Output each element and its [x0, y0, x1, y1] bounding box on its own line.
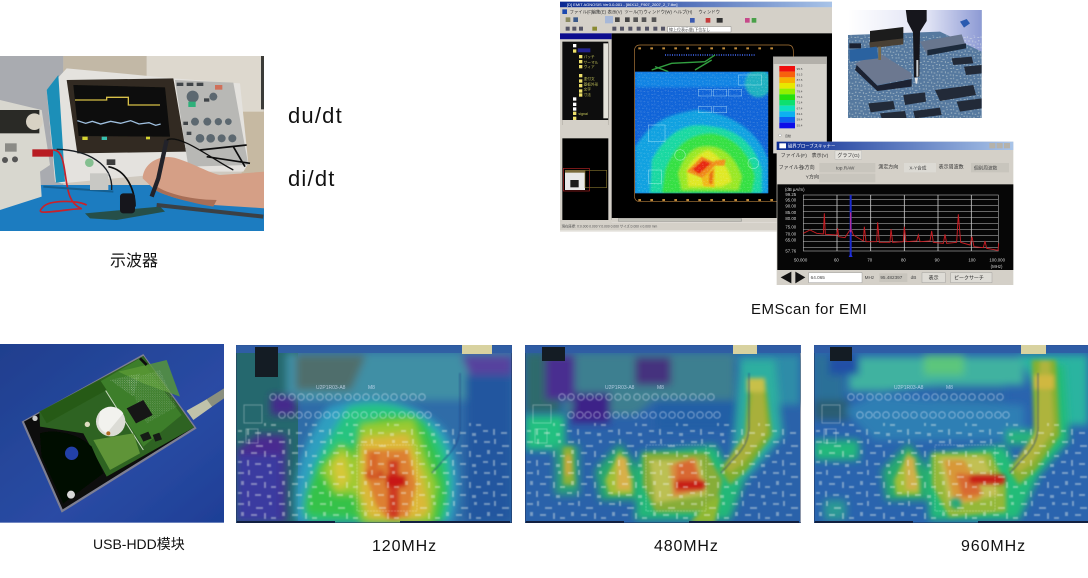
legend window: 71.4 — [797, 101, 803, 105]
legend window: 75.4 — [797, 95, 803, 99]
window: magnetic probe scanner spectrum: グラフ(G) — [837, 152, 860, 159]
label: EMScan for EMI: EMScan for EMI — [751, 301, 867, 318]
legend window: 自動 — [785, 133, 791, 138]
window: magnetic probe scanner spectrum: 個別周波数 — [974, 164, 998, 171]
label: USB-HDD module: USB-HDD模块 — [93, 536, 185, 552]
spectrum chart: 100 — [968, 257, 976, 262]
window: magnetic probe scanner spectrum: 磁界プローブスキャナー — [788, 143, 835, 150]
heat map: 480MHz — [525, 345, 801, 523]
spectrum chart: 90 — [935, 257, 940, 262]
window: magnetic probe scanner spectrum: 測定方向 — [878, 164, 898, 171]
formula: du/dt: du/dt — [288, 103, 343, 128]
label: 960MHz: 960MHz — [961, 538, 1026, 555]
window: EMScan PCB heat map software: パッチ — [584, 54, 595, 59]
window: EMScan PCB heat map software: ファイル(F) — [570, 9, 593, 15]
spectrum chart: 60 — [834, 257, 839, 262]
legend window: 79.4 — [797, 89, 803, 93]
window: EMScan PCB heat map software: 寸法 — [584, 92, 591, 97]
spectrum chart: 95.00 — [785, 198, 797, 203]
window: magnetic probe scanner spectrum: X方向 — [801, 164, 815, 171]
window: EMScan PCB heat map software: 表示(V) — [608, 8, 623, 15]
window: EMScan PCB heat map software: ウィンドウ — [698, 8, 720, 14]
window: EMScan PCB heat map software: 塗付文 — [584, 76, 595, 81]
window: magnetic probe scanner spectrum: 表示周波数 — [939, 164, 964, 171]
spectrum chart: 80 — [901, 257, 906, 262]
legend window: 91.5 — [797, 72, 803, 76]
window: EMScan PCB heat map software: signal — [578, 112, 588, 116]
window: magnetic probe scanner spectrum: 表示 — [929, 274, 939, 281]
window: EMScan PCB heat map software: サーマル — [584, 59, 599, 64]
legend window: 87.5 — [797, 78, 803, 82]
legend window: 63.4 — [797, 112, 803, 116]
window: magnetic probe scanner spectrum: ファイル(F) — [781, 153, 807, 159]
heat map: 960MHz — [814, 345, 1088, 523]
window: magnetic probe scanner spectrum: X-Y合成 — [909, 164, 927, 171]
spectrum chart: 90.00 — [785, 204, 797, 209]
window: magnetic probe scanner spectrum: ピークサーチ — [954, 275, 984, 281]
spectrum chart: 99.25 — [785, 192, 797, 197]
spectrum chart — [777, 184, 1013, 270]
window: EMScan PCB heat map software: 文字 — [584, 87, 591, 92]
window: EMScan PCB heat map software: 線上位表示層(下位なし — [669, 26, 710, 32]
window: magnetic probe scanner spectrum: dB — [911, 275, 916, 280]
window: EMScan PCB heat map software: ツール(T) — [624, 9, 643, 14]
window: EMScan PCB heat map software: ヘルプ(H) — [673, 9, 693, 15]
spectrum chart: 75.00 — [785, 225, 797, 230]
window: EMScan PCB heat map software: 現在座標: X:0.000 0.000 Y:0.000 0.000 サイズ:0.000 x 0.000 mm — [562, 224, 658, 229]
photo: USB-HDD module — [0, 344, 224, 523]
photo: probe over circuit board — [848, 9, 982, 118]
window: magnetic probe scanner spectrum: MHz — [865, 275, 875, 280]
legend window: 59.4 — [797, 118, 803, 122]
spectrum chart: 70.00 — [785, 231, 797, 236]
window: magnetic probe scanner spectrum: 64.065 — [811, 275, 825, 280]
spectrum chart: 65.00 — [785, 238, 797, 243]
spectrum chart: (MHz) — [991, 264, 1003, 269]
window: EMScan PCB heat map software — [560, 2, 833, 232]
legend window — [773, 57, 827, 153]
legend window: 67.4 — [797, 106, 803, 110]
spectrum chart: 70 — [867, 257, 873, 262]
legend window: 55.4 — [797, 123, 803, 127]
spectrum chart: 80.00 — [785, 216, 797, 221]
photo: oscilloscope — [0, 56, 267, 233]
label: oscilloscope: 示波器 — [110, 252, 158, 270]
spectrum chart: 50.000 — [794, 257, 808, 262]
window: EMScan PCB heat map software: [D] EMIT AGNOSIS Ver3.0-001 - [86X12_F907_2007_2_7.tbn] — [567, 2, 677, 7]
window: magnetic probe scanner spectrum: Y方向 — [806, 174, 819, 181]
formula: di/dt: di/dt — [288, 166, 336, 191]
window: EMScan PCB heat map software: 編集(E) — [592, 8, 607, 15]
spectrum chart: 100.000 — [989, 257, 1006, 262]
heat map: 120MHz — [236, 345, 512, 523]
spectrum chart: (dB μA/m) — [785, 187, 805, 192]
label: 480MHz: 480MHz — [654, 538, 719, 555]
window: magnetic probe scanner spectrum: top.RAW — [836, 165, 855, 170]
legend window: 83.5 — [797, 84, 803, 88]
spectrum chart: 85.00 — [785, 210, 797, 215]
window: magnetic probe scanner spectrum: ファイル名 — [779, 164, 804, 171]
window: magnetic probe scanner spectrum — [777, 142, 1013, 285]
window: EMScan PCB heat map software: ヴィア — [584, 64, 595, 69]
window: EMScan PCB heat map software: ウィンドウ(W) — [643, 8, 672, 14]
label: 120MHz: 120MHz — [372, 538, 437, 555]
spectrum chart: 57.76 — [785, 248, 797, 253]
legend window: 95.5 — [797, 67, 803, 71]
window: magnetic probe scanner spectrum: 表示(V) — [812, 152, 829, 159]
window: magnetic probe scanner spectrum: 95.482397 — [880, 275, 903, 280]
window: EMScan PCB heat map software: 基板外形 — [584, 81, 599, 86]
